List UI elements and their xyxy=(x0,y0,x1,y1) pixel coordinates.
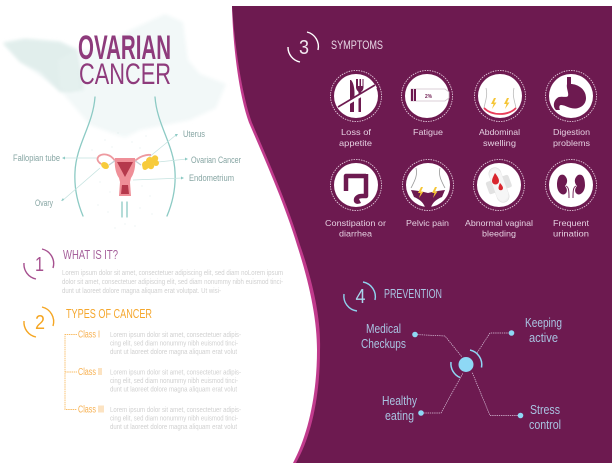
class descriptions: cing elit, sed diam nonummy nibh euismod tinci- xyxy=(110,378,239,385)
diagram labels: Endometrium xyxy=(189,173,234,183)
connector lines xyxy=(415,333,520,416)
bracket xyxy=(65,334,77,410)
label: symptoms row 2: Abnormal vaginal xyxy=(465,218,533,228)
class descriptions: cing elit, sed diam nonummy nibh euismod tinci- xyxy=(110,340,239,348)
prevention labels xyxy=(361,316,562,432)
section 3: symptoms xyxy=(288,32,596,238)
label: symptoms row 1: Fatigue xyxy=(413,127,443,137)
prevention labels: Keeping xyxy=(525,316,562,330)
heading: what is it: WHAT IS IT? xyxy=(63,247,118,262)
number 1 xyxy=(24,249,54,279)
number 1: 1 xyxy=(35,254,44,276)
class descriptions: Lorem ipsum dolor sit amet, consectetuer adipis- xyxy=(110,332,242,339)
class descriptions: cing elit, sed diam nonummy nibh euismod tinci- xyxy=(110,416,239,422)
label: symptoms row 1: Loss of xyxy=(341,127,372,137)
prevention labels: Healthy xyxy=(382,394,418,408)
icon: bleeding pad xyxy=(474,160,524,210)
label: symptoms row 2: bleeding xyxy=(482,228,516,238)
label: symptoms row 1: Digestion xyxy=(553,127,590,137)
hub xyxy=(451,350,482,378)
node dots xyxy=(412,330,523,418)
heading: symptoms: SYMPTOMS xyxy=(331,40,383,52)
class descriptions: Lorem ipsum dolor sit amet, consectetuer adipis- xyxy=(110,407,242,414)
icon: digestion stomach xyxy=(546,70,596,122)
number 4: 4 xyxy=(356,286,366,308)
label: symptoms row 1: appetite xyxy=(339,138,372,148)
specks around uterus xyxy=(92,132,152,228)
prevention labels: active xyxy=(529,331,558,345)
title: CANCER xyxy=(79,58,171,91)
class descriptions: Lorem ipsum dolor sit amet, consectetuer adipis- xyxy=(110,370,242,376)
icon: abdominal swelling xyxy=(474,70,526,122)
class labels: Class III xyxy=(78,404,104,416)
prevention labels: control xyxy=(529,418,561,432)
title: OVARIAN xyxy=(78,29,171,67)
class descriptions xyxy=(110,332,242,431)
label: symptoms row 1 xyxy=(339,127,590,148)
watercolor background xyxy=(3,14,226,227)
heading: prevention: PREVENTION xyxy=(384,287,442,301)
number 3: 3 xyxy=(299,37,309,59)
diagram labels: Fallopian tube xyxy=(13,153,60,163)
label: symptoms row 2: diarrhea xyxy=(339,228,372,238)
icon: fatigue battery xyxy=(402,70,452,122)
diagram labels: Ovary xyxy=(35,198,53,208)
number 2: 2 xyxy=(35,312,45,334)
label: symptoms row 1: Abdominal xyxy=(479,127,520,137)
uterus diagram xyxy=(98,154,159,196)
icon: loss of appetite xyxy=(330,70,382,122)
section 1: what is it xyxy=(24,247,284,295)
diagram leader lines xyxy=(62,135,187,201)
class labels: Class II xyxy=(78,367,102,378)
icon: constipation colon xyxy=(330,160,382,210)
section 4: prevention xyxy=(344,282,562,432)
label: symptoms row 2 xyxy=(325,218,590,238)
prevention labels: Checkups xyxy=(361,337,406,351)
label: symptoms row 1: swelling xyxy=(483,138,516,148)
section 2: types of cancer xyxy=(24,306,242,431)
label: symptoms row 2: Frequent xyxy=(553,218,590,228)
text block: what is it: Lorem ipsum dolor sit amet, consectetuer adipiscing elit, sed diam noLorem ipsum xyxy=(62,270,283,277)
text block: what is it xyxy=(62,270,284,295)
text block: what is it: dunt ut laoreet dolore magna aliquam erat volutpat. Ut wisi- xyxy=(62,288,222,295)
class descriptions: dunt ut laoreet dolore magna aliquam erat volut xyxy=(110,386,237,394)
title xyxy=(78,29,171,91)
panel: purple background xyxy=(232,6,612,463)
diagram labels xyxy=(13,129,241,208)
class labels xyxy=(78,330,104,416)
prevention labels: Stress xyxy=(530,403,560,417)
prevention labels: eating xyxy=(385,409,414,423)
label: symptoms row 2: Constipation or xyxy=(325,218,386,228)
label: symptoms row 1: problems xyxy=(553,138,590,148)
number 3 xyxy=(288,32,318,62)
diagram labels: Ovarian Cancer xyxy=(191,155,241,165)
number 2 xyxy=(24,307,54,337)
class labels: Class I xyxy=(78,330,100,340)
heading: types of cancer: TYPES OF CANCER xyxy=(66,306,152,321)
diagram labels: Uterus xyxy=(183,129,205,139)
class descriptions: dunt ut laoreet dolore magna aliquam erat volut xyxy=(110,349,237,356)
icon: fatigue battery: 2% xyxy=(425,94,432,100)
class descriptions: dunt ut laoreet dolore magna aliquam erat volut xyxy=(110,424,237,431)
icon: urination kidneys xyxy=(546,160,596,210)
label: symptoms row 2: urination xyxy=(553,228,589,238)
prevention labels: Medical xyxy=(366,322,401,336)
icon: pelvic pain xyxy=(402,160,454,210)
text block: what is it: dolor sit amet, consectetuer adipiscing elit, sed diam nonummy nibh euismod tinci- xyxy=(62,279,284,286)
number 4 xyxy=(344,282,375,311)
label: symptoms row 2: Pelvic pain xyxy=(406,218,449,228)
body outline xyxy=(75,97,175,217)
